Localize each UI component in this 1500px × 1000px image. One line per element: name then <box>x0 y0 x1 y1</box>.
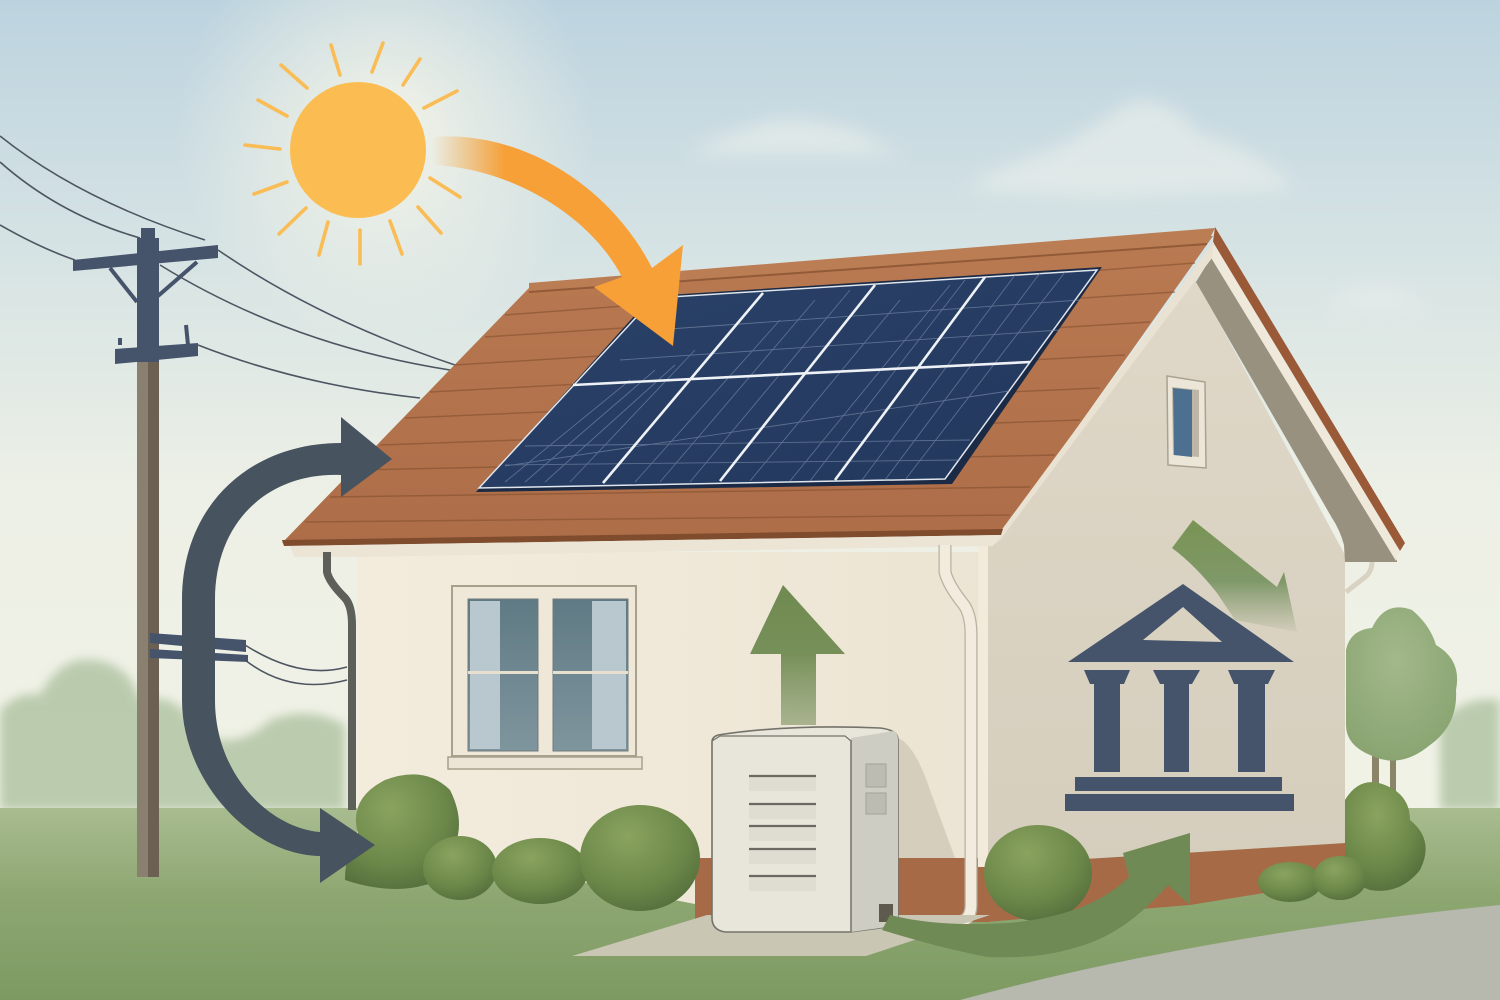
roof <box>282 236 1213 543</box>
lawn <box>0 808 1500 1000</box>
arrow: battery up <box>750 585 845 725</box>
sun <box>245 43 460 264</box>
distant trees <box>0 659 1500 810</box>
roof eave rim <box>282 529 1003 546</box>
front window <box>448 586 642 769</box>
bushes <box>345 774 1426 921</box>
downspout left <box>327 552 352 810</box>
gutter right <box>1346 562 1372 592</box>
eave fascia <box>290 535 1001 557</box>
shingle lines <box>305 263 1195 522</box>
corner trim <box>978 545 988 867</box>
solar panel array <box>476 267 1102 492</box>
driveway <box>960 905 1500 1000</box>
side brick base <box>985 843 1345 922</box>
front wall <box>357 552 992 905</box>
house <box>282 227 1405 923</box>
arrow: battery to street <box>882 833 1190 957</box>
battery shadow on wall <box>898 738 955 858</box>
gable fascia <box>1210 242 1400 561</box>
arrow: sunlight to panels <box>433 136 683 346</box>
downspout right <box>900 545 971 923</box>
arrow: grid to home and back <box>182 417 392 883</box>
gable wall <box>988 280 1345 865</box>
clouds <box>690 101 1430 312</box>
sun rays <box>245 43 460 264</box>
attic window <box>1167 376 1206 468</box>
bank icon <box>1065 584 1294 811</box>
gable soffit <box>1196 256 1397 562</box>
battery unit <box>712 727 898 932</box>
arrow: to bank <box>1172 520 1297 632</box>
utility pole with wires <box>0 136 455 877</box>
roof left fascia <box>990 242 1214 548</box>
right tree <box>1346 607 1457 800</box>
gable roof edge <box>1213 227 1405 551</box>
concrete pad <box>572 915 990 956</box>
brick base <box>695 858 990 922</box>
ridge cap <box>529 228 1215 292</box>
sun glow <box>175 0 595 340</box>
